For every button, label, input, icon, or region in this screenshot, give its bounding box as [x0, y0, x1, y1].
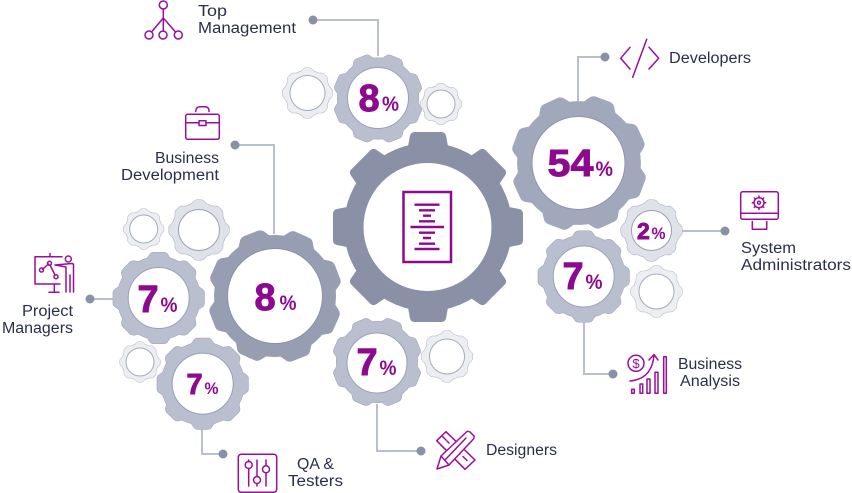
gear: developers 54%: %: [596, 158, 613, 181]
gear: small lower left: [120, 342, 160, 382]
label: business development: Development: [121, 167, 220, 184]
gear: system administrators 2%: [621, 200, 682, 261]
gear: small right of top management: [420, 84, 462, 124]
gear: designers 7%: 7: [356, 342, 378, 384]
gear: business analysis 7%: [538, 231, 629, 322]
gear: business analysis 7%: %: [586, 271, 603, 294]
gear: developers 54%: 54: [548, 143, 594, 185]
icon: presenter at board: [35, 254, 74, 292]
connector: business analysis: [584, 321, 618, 378]
label: QA and testers: Testers: [288, 473, 343, 490]
label: business analysis: [678, 356, 742, 390]
label: project managers: Managers: [2, 320, 73, 337]
label: business analysis: Business: [678, 356, 742, 373]
connector: designers: [377, 404, 426, 456]
gear: developers 54%: [491, 75, 667, 251]
connector: business development: [230, 140, 274, 234]
gear: small below 2%: [631, 266, 682, 317]
label: QA and testers: QA &: [297, 456, 335, 473]
label: designers: Designers: [486, 442, 557, 459]
gear: top management 8%: %: [382, 93, 399, 116]
connector: project managers: [86, 294, 115, 304]
icon: sliders: [238, 454, 277, 492]
gear: QA and testers 7%: 7: [186, 369, 203, 401]
label: top management: Management: [198, 20, 297, 37]
gear: business development 8%: 8: [254, 277, 276, 319]
gear: business analysis 7%: 7: [562, 256, 584, 298]
connector: top management: [308, 16, 378, 56]
label: top management: [198, 3, 297, 37]
label: developers: Developers: [669, 50, 751, 67]
gear: small left of top management: [282, 68, 332, 118]
gear: designers 7%: [319, 304, 435, 420]
central gear: [333, 132, 523, 322]
connector: system administrators: [681, 226, 730, 236]
icon: org chart: [145, 1, 182, 39]
gear: designers 7%: %: [380, 357, 397, 380]
icon: monitor with gear: [741, 192, 778, 229]
gear: system administrators 2%: 2: [637, 218, 650, 244]
gear: QA and testers 7%: %: [204, 379, 218, 398]
gear: project managers 7%: [113, 252, 204, 344]
gear: top management 8%: [320, 40, 436, 157]
gear: system administrators 2%: %: [652, 224, 666, 243]
label: project managers: Project: [22, 303, 74, 320]
gear: small upper left: [124, 209, 164, 249]
label: business analysis: Analysis: [680, 373, 740, 390]
icon: document: [404, 192, 451, 262]
label: top management: Top: [198, 3, 227, 20]
label: business development: Business: [155, 150, 219, 167]
connector: QA and testers: [202, 428, 228, 458]
label: QA and testers: [288, 456, 343, 490]
icon: pencil and ruler: [437, 431, 475, 469]
icon: growth chart: [628, 354, 666, 393]
label: system administrators: System: [741, 240, 796, 257]
gear: small right of designers: [422, 331, 472, 382]
label: project managers: [2, 303, 74, 337]
gear: project managers 7%: 7: [138, 279, 159, 321]
icon: growth chart: $: [632, 356, 640, 371]
gear: QA and testers 7%: [157, 338, 248, 429]
gear: top management 8%: 8: [358, 78, 380, 120]
connector: developers: [578, 52, 610, 101]
label: system administrators: [741, 240, 851, 274]
gear: business development 8%: [187, 208, 363, 384]
label: business development: [121, 150, 220, 184]
gear: project managers 7%: %: [160, 294, 178, 317]
gear: small upper right: [169, 200, 229, 260]
gear: business development 8%: %: [280, 292, 297, 315]
icon: briefcase: [186, 107, 219, 139]
icon: code brackets: [621, 39, 659, 77]
label: system administrators: Administrators: [741, 257, 851, 274]
